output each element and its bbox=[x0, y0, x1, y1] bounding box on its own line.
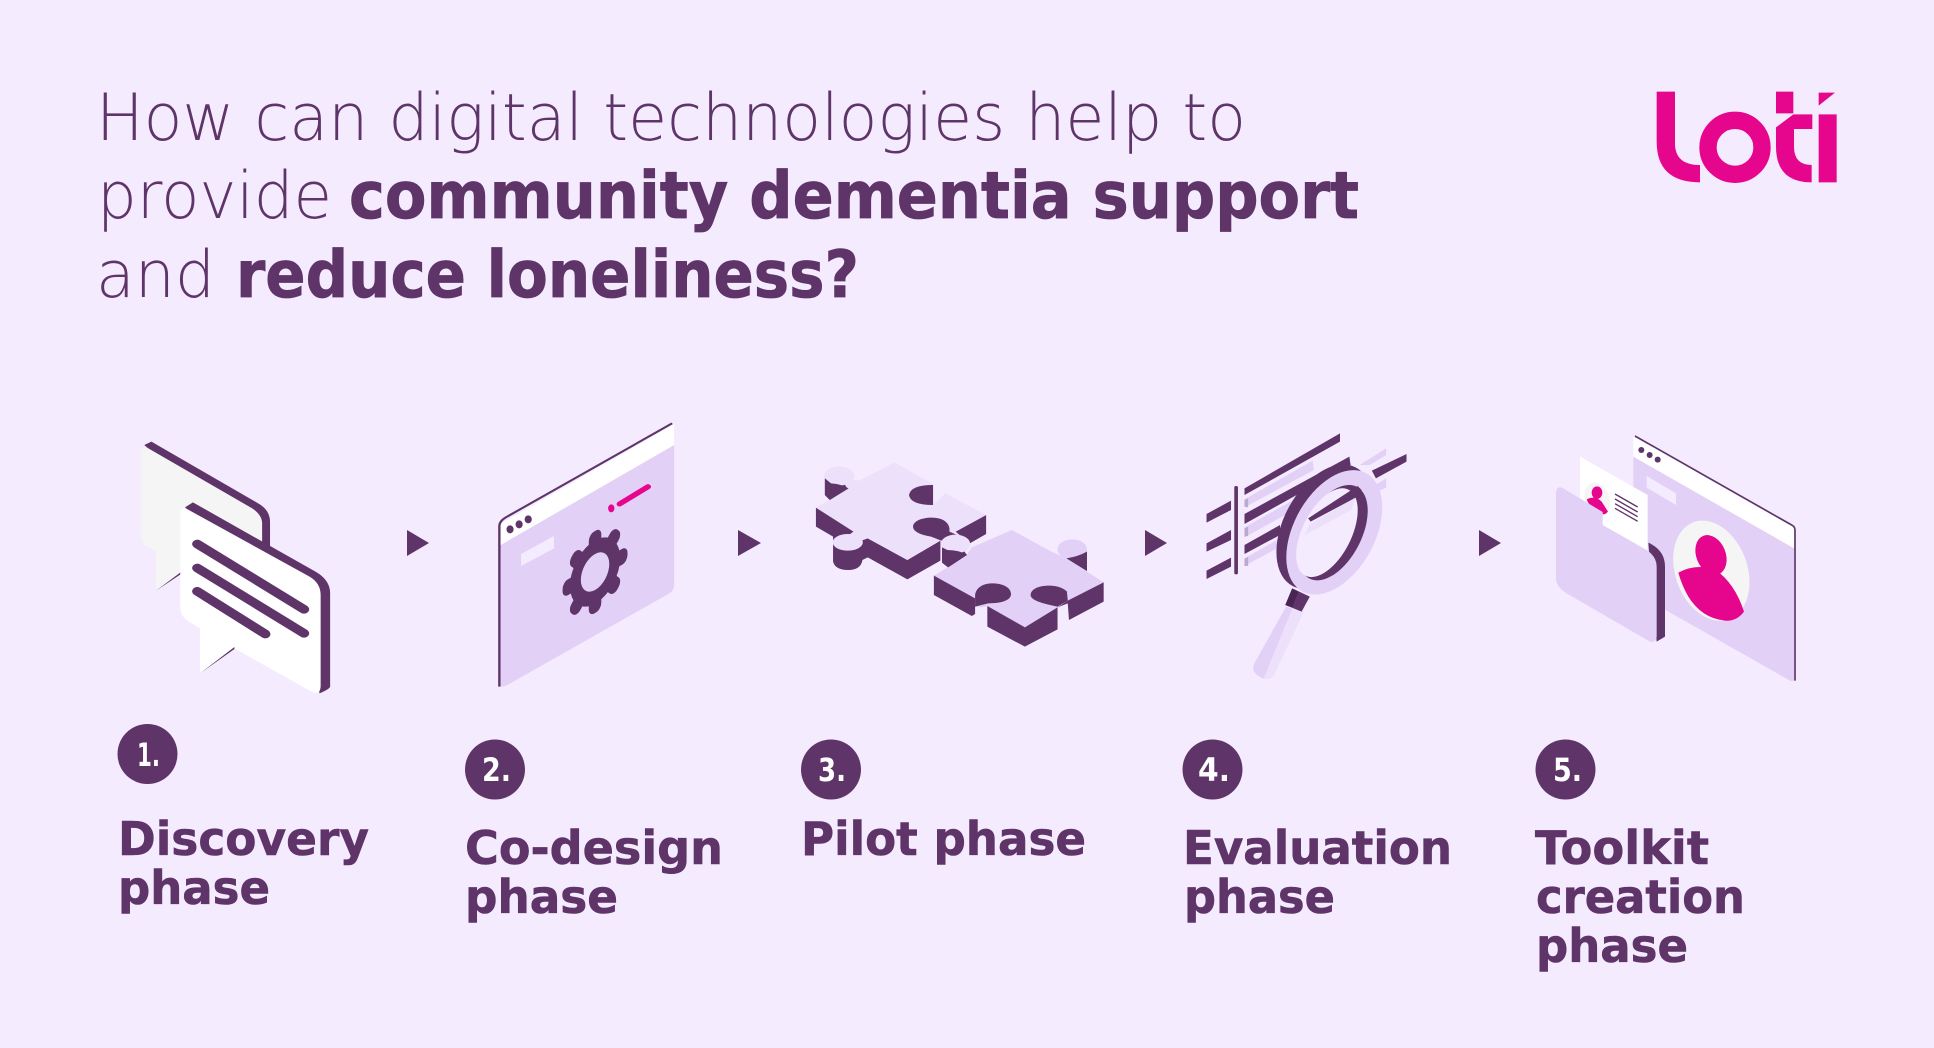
number badge 5 bbox=[1536, 740, 1596, 800]
number badge 1 bbox=[118, 724, 178, 784]
label: Pilot phase: Pilot phase bbox=[801, 812, 1086, 866]
label: Evaluation phase: Evaluation bbox=[1183, 821, 1452, 875]
label: Toolkit creation phase: Toolkit bbox=[1535, 821, 1709, 875]
arrow 1 bbox=[407, 530, 429, 556]
number badge 2: 2. bbox=[482, 751, 511, 789]
arrow 2 bbox=[738, 530, 761, 556]
step 2 bbox=[465, 740, 723, 924]
gear bbox=[563, 513, 628, 631]
icon: puzzle pieces bbox=[816, 462, 1104, 647]
label: Discovery phase: phase bbox=[118, 861, 270, 915]
number badge 4 bbox=[1182, 740, 1242, 800]
arrow 3 bbox=[1145, 530, 1167, 556]
number badge 5: 5. bbox=[1553, 751, 1582, 789]
logo: loti bbox=[1657, 92, 1837, 182]
icon: magnifier over text lines bbox=[1207, 433, 1407, 679]
number badge 3: 3. bbox=[818, 751, 846, 789]
number badge 1: 1. bbox=[137, 736, 160, 774]
title: and bbox=[96, 238, 215, 313]
title: reduce loneliness? bbox=[236, 238, 859, 313]
label: Discovery phase bbox=[118, 812, 369, 915]
label: Toolkit creation phase: phase bbox=[1536, 919, 1688, 973]
number badge 4: 4. bbox=[1198, 751, 1230, 789]
icon: browser with gear bbox=[499, 423, 674, 687]
title bbox=[96, 81, 1359, 313]
icon: chat bubbles bbox=[141, 442, 330, 693]
label: Evaluation phase bbox=[1183, 821, 1452, 924]
label: Co-design phase: phase bbox=[465, 870, 618, 924]
number badge 2 bbox=[465, 740, 525, 800]
arrow 4 bbox=[1479, 530, 1501, 556]
label: Toolkit creation phase: creation bbox=[1536, 870, 1745, 924]
title: community dementia support bbox=[349, 159, 1359, 234]
step 4 bbox=[1182, 740, 1452, 924]
label: Evaluation phase: phase bbox=[1184, 870, 1335, 924]
icon: folder and profile window bbox=[1556, 436, 1795, 681]
step 1 bbox=[118, 724, 369, 915]
label: Co-design phase bbox=[465, 821, 723, 924]
step 3 bbox=[801, 740, 1086, 866]
number badge 3 bbox=[801, 740, 861, 800]
label: Discovery phase: Discovery bbox=[118, 812, 369, 866]
title: provide bbox=[97, 159, 332, 234]
label: Toolkit creation phase bbox=[1535, 821, 1745, 973]
label: Co-design phase: Co-design bbox=[465, 821, 723, 875]
title: How can digital technologies help to bbox=[96, 81, 1246, 156]
step 5 bbox=[1535, 740, 1745, 973]
